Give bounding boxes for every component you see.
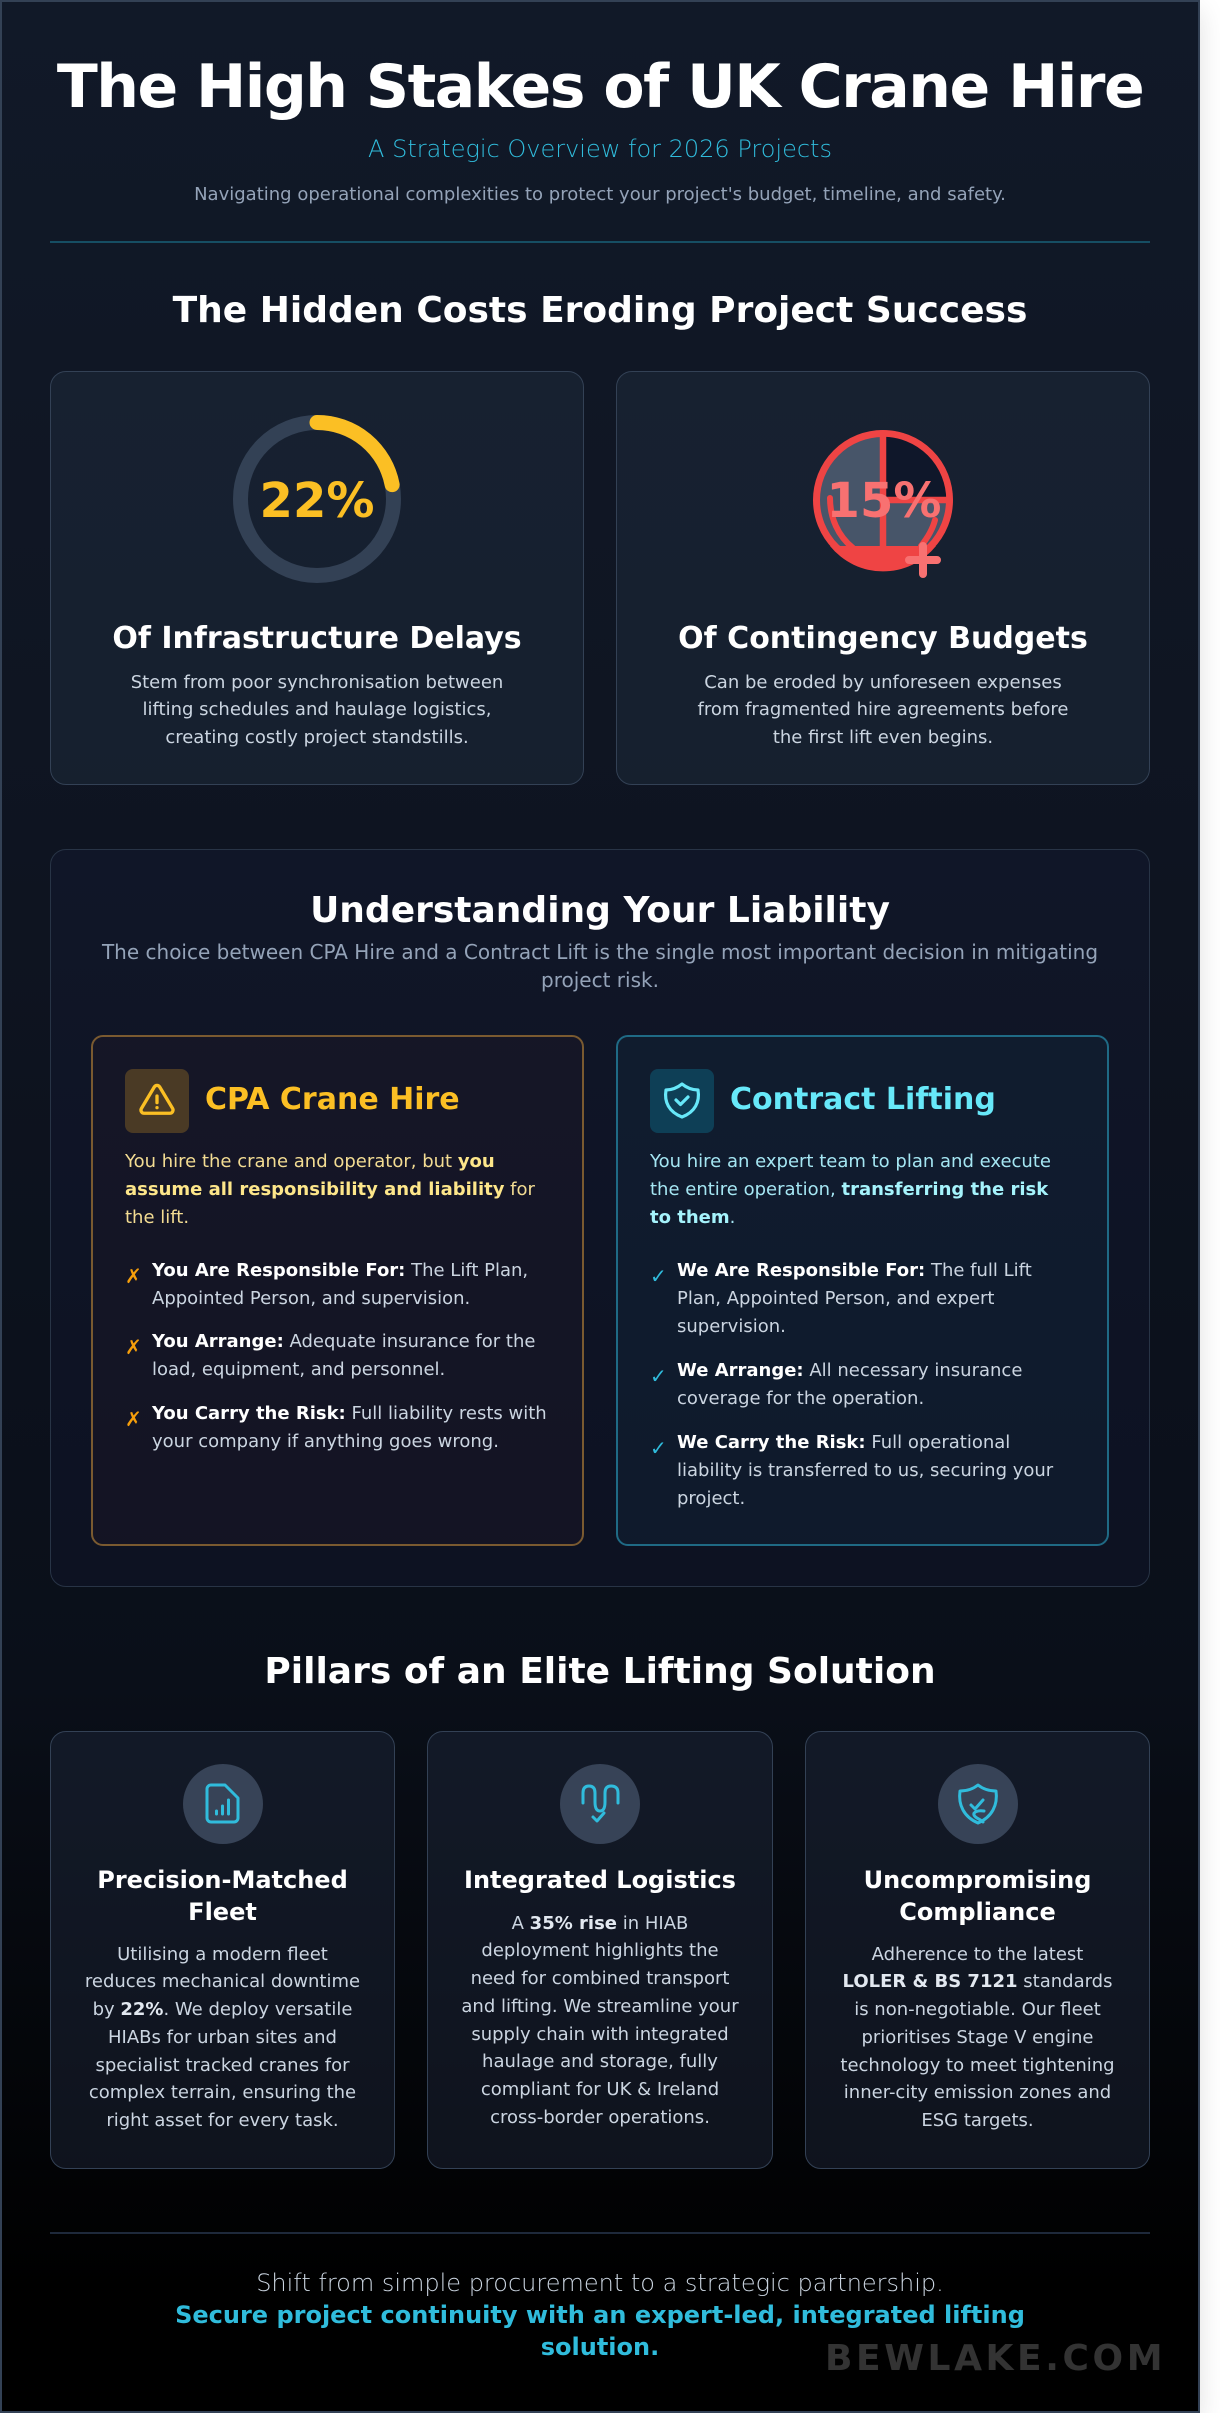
- panel: integrated logistics: [427, 1731, 773, 2169]
- list item: You Arrange: Adequate insurance for the: [152, 1331, 535, 1352]
- card text: the first lift even begins.: [773, 727, 993, 748]
- card text: [840, 1944, 1115, 2131]
- list item: coverage for the operation.: [677, 1388, 924, 1409]
- icon: document chart: [182, 1764, 262, 1844]
- card text: compliant for UK & Ireland: [481, 2079, 719, 2100]
- card text: prioritises Stage V engine: [861, 2027, 1094, 2048]
- card text: complex terrain, ensuring the: [89, 2082, 356, 2103]
- description: You hire an expert team to plan and execute: [650, 1151, 1051, 1172]
- card text: Adherence to the latest: [872, 1944, 1083, 1964]
- intro text: project risk.: [541, 968, 659, 992]
- card heading: [97, 1866, 348, 1926]
- list item: [650, 1360, 1022, 1409]
- list item: Appointed Person, and supervision.: [152, 1288, 470, 1309]
- card text: by 22%. We deploy versatile: [93, 1999, 352, 2020]
- heading: Understanding Your Liability: [310, 890, 890, 930]
- heading: pillars: Pillars of an Elite Lifting Solution: [264, 1651, 936, 1692]
- description: You hire the crane and operator, but you: [125, 1151, 495, 1172]
- icon: warning triangle: [125, 1068, 189, 1132]
- list item: [125, 1260, 528, 1309]
- heading: CPA Crane Hire: [205, 1082, 460, 1116]
- card text: Can be eroded by unforeseen expenses: [704, 672, 1062, 692]
- card heading: Uncompromising: [864, 1866, 1091, 1894]
- card text: creating costly project standstills.: [165, 727, 469, 748]
- card text: ESG targets.: [921, 2110, 1034, 2131]
- list item: [650, 1432, 1054, 1509]
- description: to them.: [650, 1207, 735, 1228]
- list item: ✓: [650, 1436, 667, 1460]
- card text: haulage and storage, fully: [482, 2051, 718, 2072]
- donut chart: 22%: 22%: [260, 473, 374, 529]
- card heading: Fleet: [188, 1898, 257, 1926]
- footer: [175, 2269, 1025, 2361]
- card text: LOLER & BS 7121 standards: [842, 1971, 1112, 1992]
- watermark: BEWLAKE.COM: [825, 2338, 1166, 2378]
- card text: reduces mechanical downtime: [85, 1971, 360, 1992]
- heading: Contract Lifting: [730, 1082, 996, 1116]
- description: [650, 1151, 1051, 1228]
- icon: logistics: [560, 1764, 640, 1844]
- donut chart: 22%: [233, 415, 401, 583]
- pie icon: 15%: 15%: [827, 473, 941, 529]
- list item: ✗: [125, 1264, 142, 1288]
- panel: 22% infrastructure delays: [50, 371, 584, 785]
- header: [57, 52, 1143, 205]
- card heading: Compliance: [899, 1898, 1056, 1926]
- description: [125, 1151, 535, 1228]
- list item: You Are Responsible For: The Lift Plan,: [152, 1260, 528, 1281]
- card heading: Of Contingency Budgets: [678, 620, 1088, 656]
- card text: from fragmented hire agreements before: [697, 699, 1069, 720]
- card text: need for combined transport: [471, 1968, 729, 1989]
- card text: lifting schedules and haulage logistics,: [143, 699, 491, 720]
- footer line: Shift from simple procurement to a strategic partnership.: [256, 2269, 944, 2297]
- card text: right asset for every task.: [106, 2110, 339, 2131]
- list item: Plan, Appointed Person, and expert: [677, 1288, 994, 1309]
- call to action: solution.: [541, 2333, 659, 2361]
- call to action: Secure project continuity with an expert-led, integrated lifting: [175, 2301, 1025, 2329]
- card text: specialist tracked cranes for: [95, 2055, 350, 2076]
- card text: inner-city emission zones and: [844, 2082, 1111, 2103]
- card heading: [864, 1866, 1091, 1926]
- list item: ✗: [125, 1335, 142, 1359]
- panel: precision-matched fleet: [50, 1731, 395, 2169]
- list item: [650, 1260, 1032, 1337]
- card text: cross-border operations.: [490, 2107, 710, 2128]
- list item: supervision.: [677, 1316, 786, 1337]
- list item: We Arrange: All necessary insurance: [677, 1360, 1022, 1381]
- card text: [131, 672, 503, 748]
- card text: technology to meet tightening: [840, 2055, 1115, 2076]
- card text: Stem from poor synchronisation between: [131, 672, 503, 692]
- card text: [697, 672, 1069, 748]
- subtitle: A Strategic Overview for 2026 Projects: [368, 135, 832, 163]
- list item: ✗: [125, 1407, 142, 1431]
- list item: ✓: [650, 1364, 667, 1388]
- pie icon: 15%: [813, 430, 953, 578]
- panel: CPA crane hire: [91, 1034, 584, 1546]
- card text: deployment highlights the: [481, 1940, 719, 1961]
- description: assume all responsibility and liability for: [125, 1179, 535, 1200]
- panel: uncompromising compliance: [805, 1731, 1150, 2169]
- list item: You Carry the Risk: Full liability rests with: [152, 1403, 547, 1424]
- card text: HIABs for urban sites and: [108, 2027, 337, 2048]
- call to action: [175, 2301, 1025, 2361]
- card heading: Of Infrastructure Delays: [112, 620, 522, 656]
- heading: hidden costs: The Hidden Costs Eroding Project Success: [173, 290, 1027, 331]
- list item: your company if anything goes wrong.: [152, 1431, 499, 1452]
- list item: We Carry the Risk: Full operational: [677, 1432, 1010, 1453]
- card text: [85, 1944, 360, 2131]
- intro text: [102, 940, 1098, 992]
- description: the lift.: [125, 1207, 189, 1228]
- list item: [125, 1331, 535, 1380]
- panel: 15% contingency budgets: [616, 371, 1150, 785]
- intro text: The choice between CPA Hire and a Contract Lift is the single most important decision in mitigating: [102, 940, 1098, 964]
- card text: supply chain with integrated: [471, 2024, 729, 2045]
- card heading: Precision-Matched: [97, 1866, 348, 1894]
- list item: project.: [677, 1488, 745, 1509]
- card text: A 35% rise in HIAB: [512, 1912, 688, 1934]
- card text: Utilising a modern fleet: [117, 1944, 328, 1964]
- card text: is non-negotiable. Our fleet: [854, 1999, 1101, 2020]
- intro line: Navigating operational complexities to protect your project's budget, timeline, and safety.: [194, 184, 1006, 205]
- panel: contract lifting: [616, 1034, 1109, 1546]
- list item: liability is transferred to us, securing your: [677, 1460, 1053, 1481]
- title: The High Stakes of UK Crane Hire: [57, 52, 1143, 122]
- list item: We Are Responsible For: The full Lift: [677, 1260, 1032, 1281]
- list item: ✓: [650, 1264, 667, 1288]
- description: the entire operation, transferring the risk: [650, 1179, 1048, 1200]
- icon: shield: [938, 1764, 1018, 1844]
- list item: [125, 1403, 547, 1452]
- icon: shield check: [650, 1068, 714, 1132]
- card text: [461, 1912, 739, 2128]
- panel: understanding your liability: [50, 849, 1150, 1587]
- card heading: Integrated Logistics: [464, 1866, 736, 1894]
- card text: and lifting. We streamline your: [461, 1996, 739, 2017]
- list item: load, equipment, and personnel.: [152, 1359, 445, 1380]
